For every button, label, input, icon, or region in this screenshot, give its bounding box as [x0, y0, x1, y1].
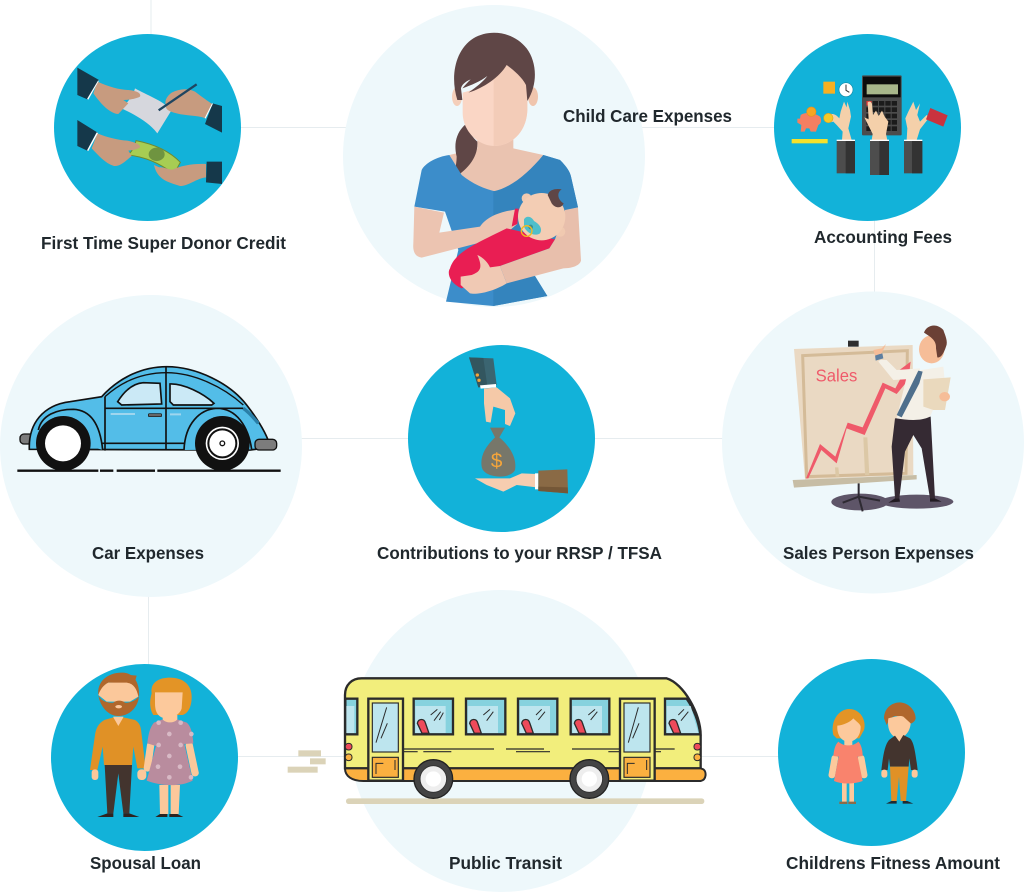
label: childrens fitness amount: Childrens Fitness Amount: [786, 853, 1000, 873]
circle: donor background: [54, 34, 241, 221]
circle: sales background: [722, 292, 1024, 594]
icon: salesman presenting chart: [793, 326, 953, 511]
circle: accounting background: [774, 34, 961, 221]
text: sales heading: Sales: [816, 365, 857, 385]
panel: public transit: [288, 590, 706, 892]
icon: yellow bus: [288, 678, 706, 804]
label: public transit: Public Transit: [449, 853, 562, 873]
panel: spousal loan: [51, 664, 238, 873]
icon: mother holding baby: [413, 33, 581, 306]
circle: child care background: [343, 5, 645, 307]
panel: accounting fees: [774, 34, 961, 247]
circle: fitness background: [778, 659, 965, 846]
label: car expenses: Car Expenses: [92, 543, 204, 563]
panel: contributions to your rrsp / tfsa: [377, 345, 662, 563]
panel: first time super donor credit: [41, 34, 286, 253]
panel: child care expenses: [343, 5, 732, 307]
circle: transit background: [350, 590, 652, 892]
label: first time super donor credit: First Time Super Donor Credit: [41, 233, 286, 253]
icon: hand dropping money bag into open hand: $: [491, 449, 503, 472]
circle: car background: [0, 295, 302, 597]
icon: calculator with hands, coin, piggy bank and card: [792, 75, 948, 175]
icon: couple holding hands: [90, 673, 199, 817]
icon: hand dropping money bag into open hand: [469, 357, 568, 493]
icon: two children: [828, 702, 918, 804]
panel: sales person expenses: [722, 292, 1024, 594]
circle: contributions background: [408, 345, 595, 532]
label: spousal loan: Spousal Loan: [90, 853, 201, 873]
panel: car expenses: [0, 295, 302, 597]
label: sales person expenses: Sales Person Expenses: [783, 543, 974, 563]
label: child care expenses: Child Care Expenses: [563, 106, 732, 126]
circle: spousal loan background: [51, 664, 238, 851]
panel: childrens fitness amount: [778, 659, 1000, 873]
icon: blue car: [17, 367, 281, 471]
label: contributions to your rrsp / tfsa: Contributions to your RRSP / TFSA: [377, 543, 662, 563]
icon: hands exchanging paper and money: [77, 68, 222, 186]
label: accounting fees: Accounting Fees: [814, 227, 952, 247]
